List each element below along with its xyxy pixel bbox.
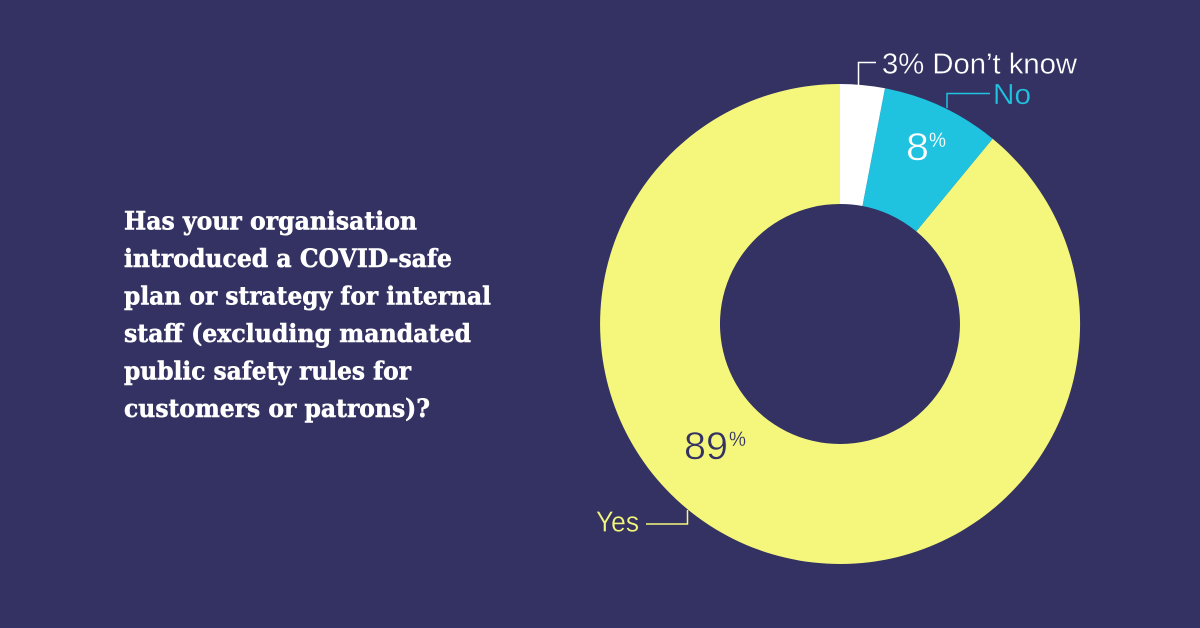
value: 89% [684,425,746,468]
question text: customers or patrons)? [124,394,430,423]
value: 8% [906,126,946,169]
label: 3% Don't know: 3% Don’t know [882,48,1078,80]
leader line: Yes [646,510,688,524]
segment: Yes 89% [600,84,1080,564]
segment: No 8% [862,88,993,231]
question text: plan or strategy for internal [124,282,491,310]
segment: Don't know 3% [840,84,885,206]
question text: staff (excluding mandated [124,319,471,348]
value: 8%: 8 [906,126,929,169]
question text: Has your organisation [124,206,417,236]
question text: introduced a COVID-safe [124,244,452,273]
label: Yes: Yes [596,506,639,538]
question text: public safety rules for [124,356,412,386]
question text [124,206,491,423]
label: No: No [993,79,1031,111]
value: 89%: 89 [684,425,728,468]
donut chart [600,84,1080,564]
value: 89%: % [729,428,746,451]
leader line: No [947,94,990,108]
value: 8%: % [929,129,946,152]
leader line: Don't know [858,62,876,85]
